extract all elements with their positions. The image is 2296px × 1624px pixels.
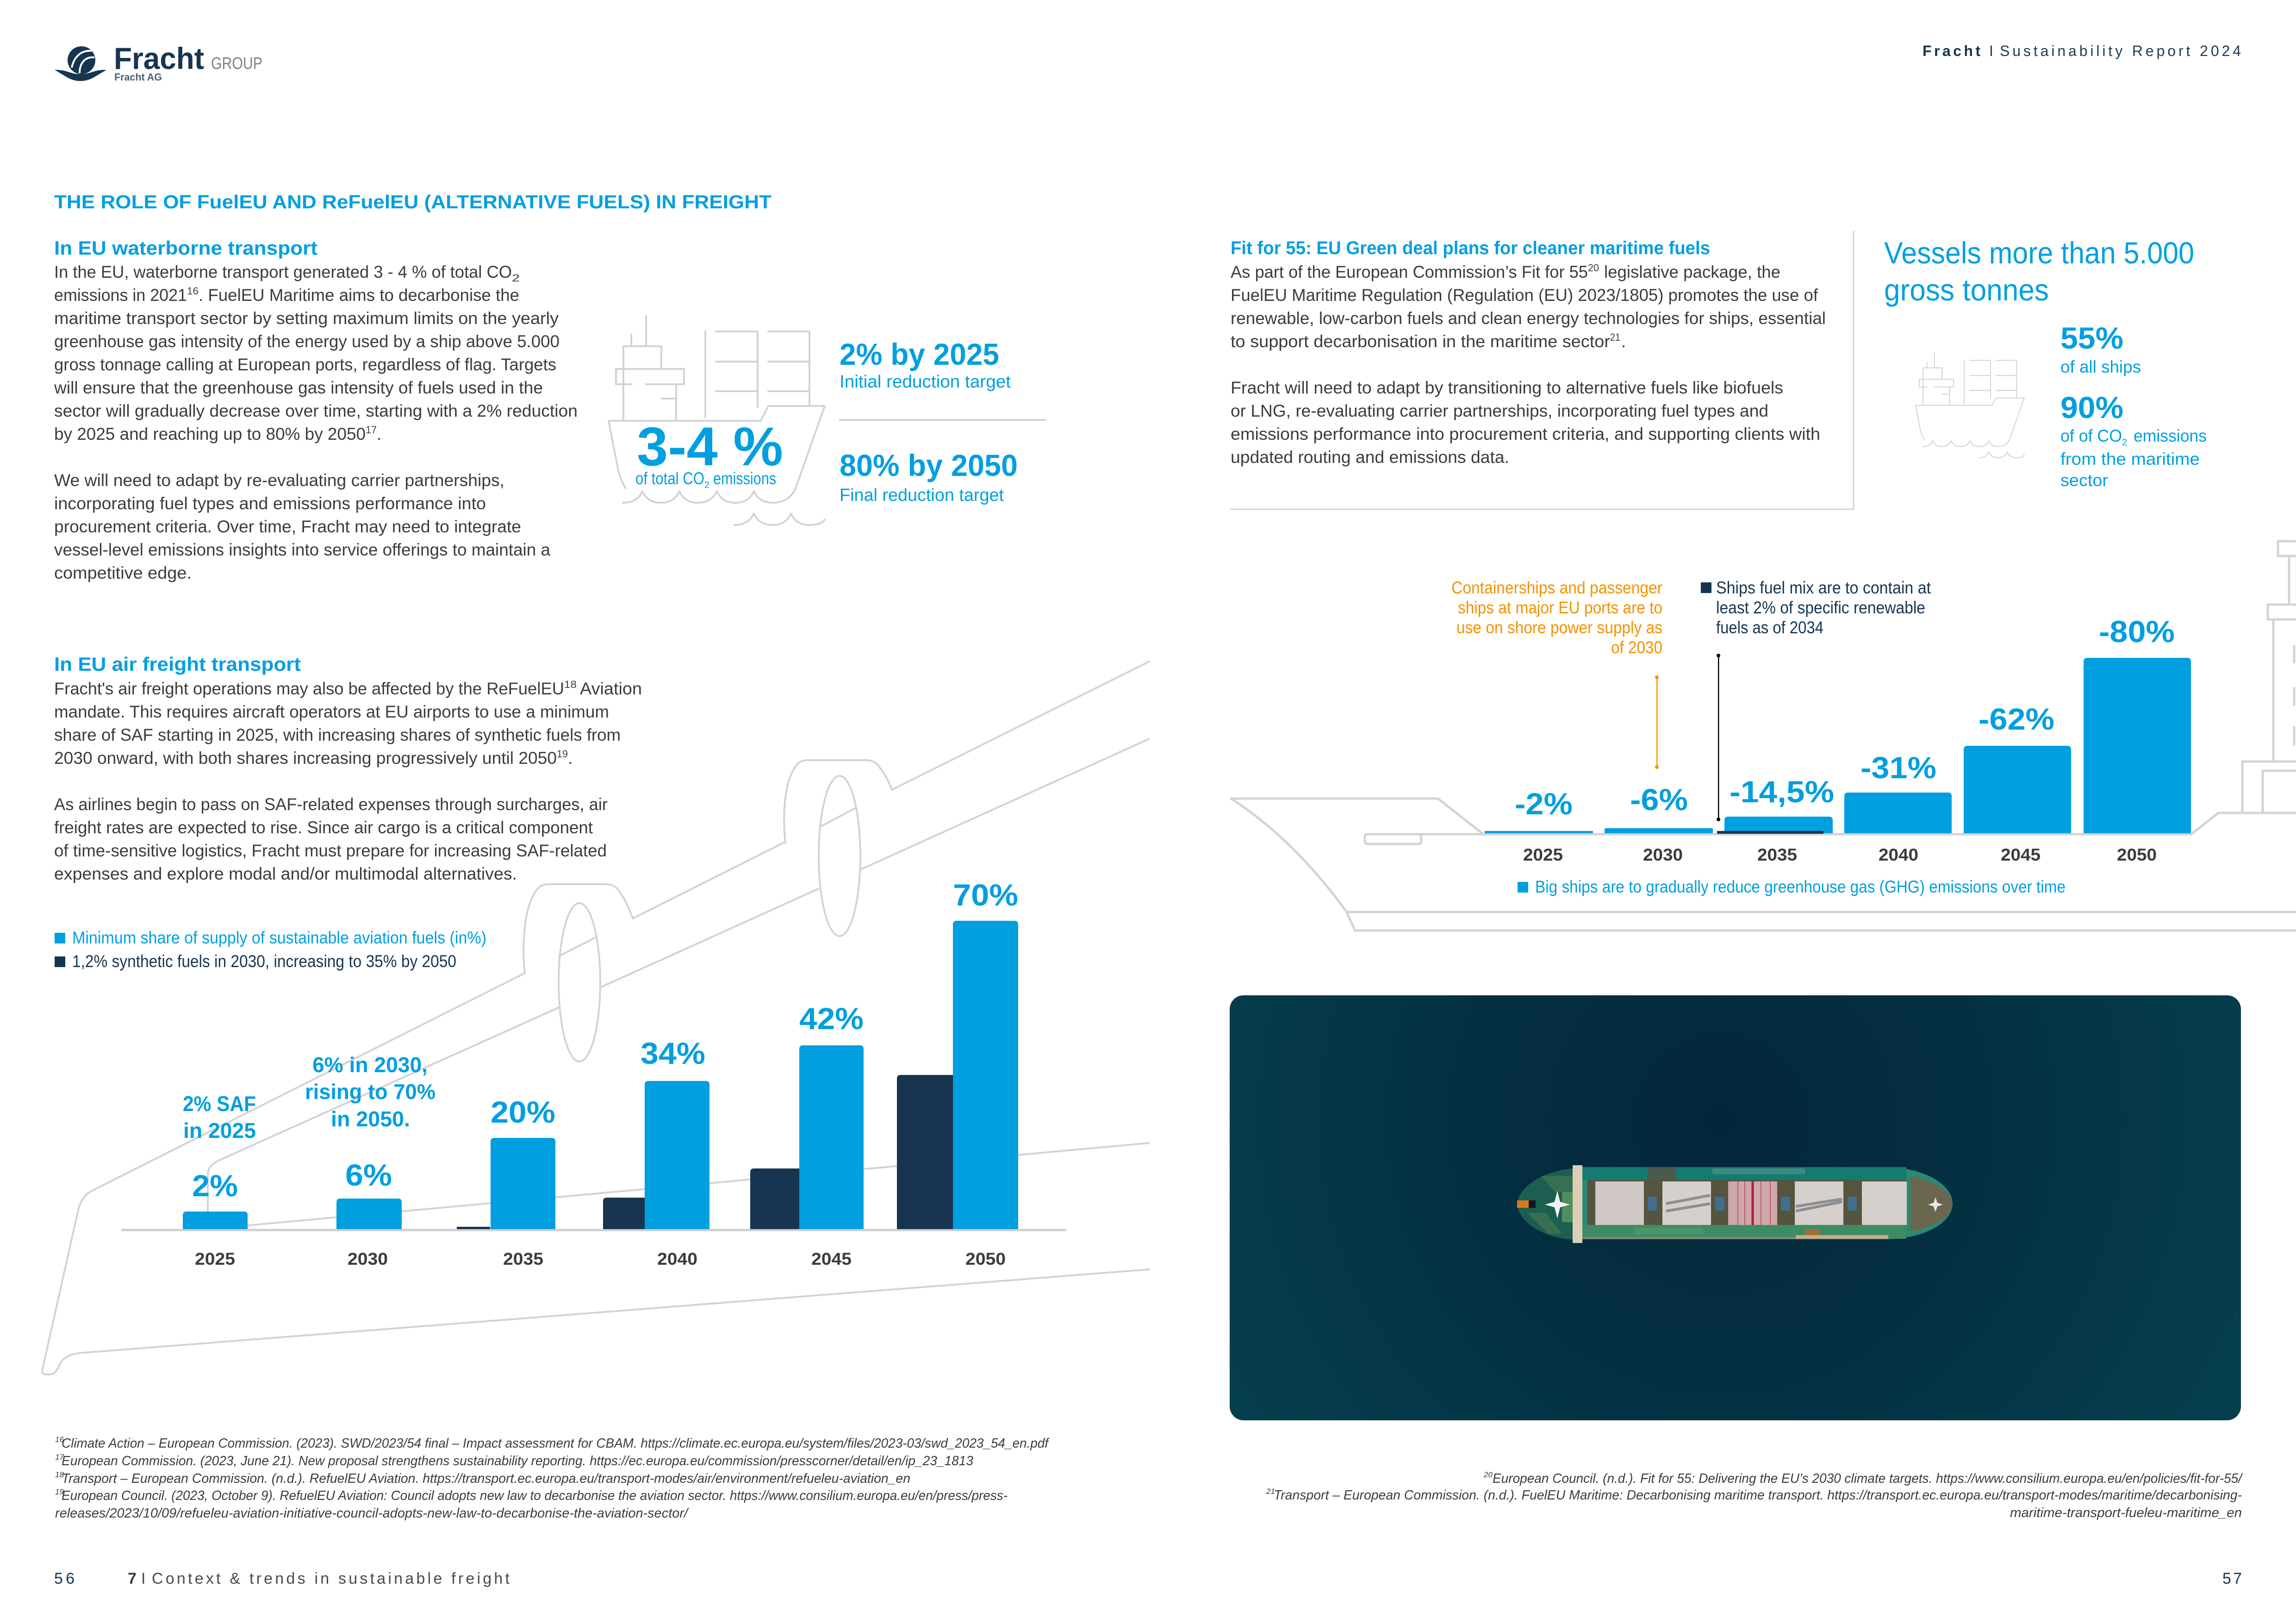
- year labels: 2040: [657, 1249, 697, 1268]
- value labels: -2%: [1515, 787, 1573, 821]
- bar chart: sustainable aviation fuels share: [121, 878, 1066, 1268]
- panel: reduction targets: 80% by 2050: [840, 448, 1018, 482]
- value labels: -31%: [1860, 750, 1936, 785]
- stat: 55%: [2060, 321, 2141, 376]
- value labels: [192, 878, 1018, 1203]
- icon: cargo ship with 3-4 % stat: [609, 316, 825, 525]
- text block: emissions in 2021: [54, 286, 187, 305]
- logo: Fracht Group: [55, 41, 262, 83]
- footnotes: right page: European Council. (n.d.). Fit for 55: Delivering the EU’s 2030 climate targets. https://www.consilium.europa.eu/en/policies/fit-for-55/: [1493, 1471, 2243, 1486]
- year labels: 2050: [965, 1249, 1006, 1268]
- text block: FuelEU Maritime Regulation (Regulation (EU) 2023/1805) promotes the use of: [1231, 286, 1818, 305]
- text block: maritime transport sector by setting maximum limits on the yearly: [54, 309, 559, 328]
- page footer: left: 56: [54, 1570, 75, 1587]
- text block: [54, 262, 578, 582]
- callout: renewable fuel mix: [1701, 578, 1931, 821]
- text block: greenhouse gas intensity of the energy used by a ship above 5.000: [54, 332, 560, 351]
- panel: vessels more than 5.000 gross tonnes: [1884, 236, 2207, 490]
- footnotes: left page: 18: [55, 1470, 64, 1479]
- callout: 6% in 2030: [305, 1053, 436, 1131]
- panel: reduction targets: [839, 337, 1046, 505]
- text block: 18: [564, 679, 577, 690]
- text block: 17: [366, 424, 377, 436]
- text block: We will need to adapt by re-evaluating carrier partnerships,: [54, 471, 504, 490]
- text block: share of SAF starting in 2025, with increasing shares of synthetic fuels from: [54, 725, 621, 744]
- page footer: left: Context & trends in sustainable freight: [152, 1570, 510, 1587]
- footnotes: left page: Climate Action – European Commission. (2023). SWD/2023/54 final – Impact assessment for CBAM. https://climate.ec.europa.eu/system/files/2023-03/swd_2023_54_en.pdf: [62, 1436, 1050, 1451]
- footnotes: right page: [1266, 1470, 2243, 1520]
- value labels: 2%: [192, 1168, 238, 1203]
- panel: reduction targets: Final reduction target: [840, 486, 1004, 505]
- stat: 90%: 2: [2122, 437, 2127, 448]
- hatches: [1595, 1181, 1907, 1225]
- text block: expenses and explore modal and/or multimodal alternatives.: [54, 864, 517, 883]
- text block: [54, 679, 642, 883]
- stat caption: [635, 469, 776, 490]
- value labels: [1515, 614, 2175, 821]
- text block: emissions performance into procurement criteria, and supporting clients with: [1231, 425, 1820, 443]
- bars: 2050: [897, 921, 1018, 1229]
- stat caption: emissions: [713, 469, 776, 488]
- footnotes: left page: 19: [55, 1487, 64, 1496]
- value labels: -80%: [2099, 614, 2175, 649]
- heading: gross tonnes: [1884, 273, 2049, 307]
- callout: shore power supply: [1451, 578, 1662, 769]
- year labels: 2025: [1523, 845, 1563, 864]
- callout: 6% in 2030: 6% in 2030,: [312, 1053, 428, 1077]
- stars and stern marks: [1545, 1191, 1570, 1218]
- text block: of time-sensitive logistics, Fracht must prepare for increasing SAF-related: [54, 841, 607, 860]
- callout: renewable fuel mix: Ships fuel mix are to contain at: [1716, 578, 1931, 597]
- stat: 90%: of of CO: [2060, 426, 2122, 445]
- callout: 6% in 2030: in 2050.: [331, 1107, 410, 1131]
- callout: 2% SAF: [183, 1092, 256, 1143]
- text block: .: [377, 425, 381, 443]
- illustration: container ship side view: [1231, 541, 2296, 931]
- bars: [1485, 658, 2191, 833]
- footnotes: left page: European Council. (2023, October 9). RefuelEU Aviation: Council adopts new law to decarbonise the aviation sector. https://www.consilium.europa.eu/en/press/press-: [62, 1488, 1008, 1503]
- footnotes: right page: 21: [1266, 1487, 1275, 1496]
- heading: In EU air freight transport: [54, 653, 301, 675]
- stat: 55%: 55%: [2060, 321, 2123, 355]
- heading: Vessels more than 5.000: [1884, 236, 2194, 270]
- year labels: 2050: [2117, 845, 2157, 864]
- callout: shore power supply: Containerships and passenger: [1451, 578, 1662, 597]
- panel: EU air freight text: [54, 653, 642, 883]
- text block: . FuelEU Maritime aims to decarbonise the: [199, 286, 519, 305]
- callout: shore power supply: ships at major EU ports are to: [1458, 598, 1662, 617]
- stat caption: 2: [704, 480, 709, 490]
- year labels: 2030: [348, 1249, 388, 1268]
- footnotes: left page: Transport – European Commission. (n.d.). RefuelEU Aviation. https://transport.ec.europa.eu/transport-modes/air/environment/refueleu-aviation_en: [62, 1471, 910, 1486]
- footnotes: left page: [55, 1435, 1050, 1521]
- fuselage lower line: [208, 739, 1149, 1212]
- footnotes: right page: Transport – European Commission. (n.d.). FuelEU Maritime: Decarbonising maritime transport. https://transport.ec.europa.eu/transport-modes/maritime/decarbonising-: [1274, 1488, 2242, 1503]
- callout: renewable fuel mix: fuels as of 2034: [1716, 618, 1823, 637]
- value labels: 6%: [345, 1158, 392, 1192]
- text block: gross tonnage calling at European ports, regardless of flag. Targets: [54, 355, 556, 374]
- legend: air freight chart: 1,2% synthetic fuels in 2030, increasing to 35% by 2050: [72, 952, 456, 971]
- panel: reduction targets: 2% by 2025: [840, 337, 999, 371]
- stat: 3-4 %: 3-4 %: [637, 416, 783, 477]
- year labels: [195, 1249, 1006, 1268]
- page footer: left: 7: [128, 1570, 137, 1587]
- heading: Fit for 55: EU Green deal plans for cleaner maritime fuels: [1231, 238, 1710, 258]
- page header: report title: Fracht: [1923, 43, 1980, 59]
- title: THE ROLE OF FuelEU AND ReFuelEU (ALTERNATIVE FUELS) IN FREIGHT: [54, 191, 772, 212]
- text block: updated routing and emissions data.: [1231, 448, 1509, 467]
- bars: 2045: [750, 1045, 864, 1229]
- logo: Fracht Group: Fracht AG: [114, 71, 162, 83]
- arrow: orange marker: [1655, 675, 1659, 769]
- panel: Fit for 55 text: [1231, 238, 1826, 467]
- text block: legislative package, the: [1604, 262, 1780, 281]
- text block: to support decarbonisation in the maritime sector: [1231, 332, 1610, 351]
- callout: 2% SAF: 2% SAF: [183, 1092, 256, 1116]
- text block: mandate. This requires aircraft operators at EU airports to use a minimum: [54, 702, 609, 721]
- year labels: 2045: [811, 1249, 852, 1268]
- engine left: [523, 884, 633, 1062]
- text block: 16: [187, 285, 199, 297]
- text block: .: [568, 749, 572, 768]
- text block: .: [1621, 332, 1626, 351]
- bar chart: ship GHG reduction targets: [1485, 614, 2191, 896]
- text block: 21: [1610, 331, 1620, 343]
- text block: vessel-level emissions insights into service offerings to maintain a: [54, 540, 550, 559]
- text block: In the EU, waterborne transport generated 3 - 4 % of total CO: [54, 262, 512, 281]
- text block: Aviation: [580, 679, 642, 698]
- year labels: 2030: [1643, 845, 1683, 864]
- page header: report title: I: [1989, 43, 1993, 59]
- axis: [121, 1229, 1066, 1231]
- bars: 2040: [603, 1081, 709, 1229]
- text block: Fracht's air freight operations may also be affected by the ReFuelEU: [54, 679, 564, 698]
- wing line: [248, 1143, 1149, 1225]
- bars: 2035: [457, 1138, 555, 1229]
- stat: 90%: 90%: [2060, 390, 2123, 425]
- value labels: 20%: [491, 1095, 555, 1129]
- text block: will ensure that the greenhouse gas intensity of fuels used in the: [54, 378, 543, 397]
- callout: 6% in 2030: rising to 70%: [305, 1080, 436, 1104]
- footnotes: right page: maritime-transport-fueleu-maritime_en: [2010, 1505, 2242, 1520]
- text block: renewable, low-carbon fuels and clean energy technologies for ships, essential: [1231, 309, 1826, 328]
- photo: aerial view of cargo ship at sea: [1230, 995, 2241, 1420]
- value labels: 70%: [953, 878, 1018, 912]
- heading: In EU waterborne transport: [54, 237, 317, 259]
- footnotes: left page: 17: [55, 1453, 64, 1462]
- stat: 90%: sector: [2060, 471, 2108, 490]
- icon: globe and wing: [55, 46, 106, 81]
- value labels: 34%: [641, 1036, 705, 1070]
- stern: [1517, 1168, 1573, 1240]
- legend: air freight chart: Minimum share of supply of sustainable aviation fuels (in%): [72, 928, 486, 947]
- stat: 90%: [2060, 390, 2207, 490]
- hatch gaps: [1587, 1180, 1907, 1225]
- illustration: aircraft outline behind air chart: [42, 662, 1149, 1374]
- stat: 90%: from the maritime: [2060, 450, 2200, 468]
- value labels: -14,5%: [1730, 775, 1834, 809]
- panel: EU waterborne transport text: [54, 237, 578, 582]
- text block: Fracht will need to adapt by transitioning to alternative fuels like biofuels: [1231, 378, 1783, 397]
- text block: 19: [557, 748, 568, 760]
- footnotes: left page: releases/2023/10/09/refueleu-aviation-initiative-council-adopts-new-law-to-decarbonise-the-aviation-sector/: [55, 1506, 689, 1521]
- year labels: 2035: [1757, 845, 1797, 864]
- text block: or LNG, re-evaluating carrier partnerships, incorporating fuel types and: [1231, 401, 1768, 420]
- heading: [1884, 236, 2194, 307]
- text block: freight rates are expected to rise. Since air cargo is a critical component: [54, 818, 593, 837]
- text block: sector will gradually decrease over time, starting with a 2% reduction: [54, 401, 578, 420]
- year labels: 2040: [1879, 845, 1918, 864]
- footnotes: left page: European Commission. (2023, June 21). New proposal strengthens sustainability reporting. https://ec.europa.eu/commission/presscorner/detail/en/ip_23_1813: [62, 1454, 973, 1468]
- text block: 20: [1588, 262, 1599, 274]
- text block: As airlines begin to pass on SAF-related expenses through surcharges, air: [54, 795, 608, 814]
- footnotes: right page: 20: [1483, 1470, 1493, 1479]
- icon: small ship outline: [1916, 353, 2024, 458]
- text block: 2: [512, 272, 520, 284]
- footnotes: left page: 16: [55, 1435, 64, 1444]
- text block: by 2025 and reaching up to 80% by 2050: [54, 425, 366, 443]
- page header: report title: Sustainability Report 2024: [2000, 43, 2241, 59]
- superstructure band: [1573, 1165, 1582, 1243]
- text block: As part of the European Commission’s Fit for 55: [1231, 262, 1588, 281]
- legend: air freight chart: [55, 928, 486, 971]
- logo: Fracht Group: Fracht: [114, 41, 204, 75]
- page number: right: 57: [2222, 1570, 2242, 1587]
- text block: competitive edge.: [54, 563, 192, 582]
- year labels: 2025: [195, 1249, 235, 1268]
- bow deck: [1910, 1176, 1953, 1231]
- page footer: left: I: [141, 1570, 145, 1587]
- engine right: [784, 760, 892, 936]
- text block: procurement criteria. Over time, Fracht may need to integrate: [54, 517, 521, 536]
- callout: 2% SAF: in 2025: [183, 1118, 256, 1143]
- panel: reduction targets: Initial reduction target: [840, 372, 1011, 392]
- hull: [1582, 1167, 1953, 1239]
- icon: ship outline: [609, 316, 825, 525]
- callout: renewable fuel mix: least 2% of specific renewable: [1716, 598, 1925, 617]
- bars: 2025: [183, 1212, 248, 1229]
- stat caption: of total CO: [635, 469, 704, 488]
- fuselage upper line: [42, 662, 1149, 1374]
- year labels: 2035: [503, 1249, 543, 1268]
- value labels: 42%: [799, 1001, 864, 1036]
- text block: [1231, 262, 1826, 467]
- bars: 2030: [336, 1199, 402, 1229]
- text block: incorporating fuel types and emissions performance into: [54, 494, 486, 513]
- callout: shore power supply: of 2030: [1611, 638, 1662, 657]
- callout: shore power supply: use on shore power supply as: [1456, 618, 1662, 637]
- bar: renewable fuels 2035: [1717, 831, 1823, 834]
- logo: Fracht Group: GROUP: [211, 54, 262, 73]
- text block: 2030 onward, with both shares increasing progressively until 2050: [54, 749, 557, 768]
- year labels: 2045: [2001, 845, 2041, 864]
- value labels: -62%: [1979, 702, 2054, 736]
- stat: 90%: emissions: [2134, 426, 2207, 445]
- legend: Big ships are to gradually reduce greenhouse gas (GHG) emissions over time: [1535, 877, 2066, 896]
- year labels: [1523, 845, 2157, 864]
- value labels: -6%: [1630, 782, 1688, 817]
- arrow: black marker: [1717, 654, 1720, 821]
- stat: 55%: of all ships: [2060, 357, 2141, 376]
